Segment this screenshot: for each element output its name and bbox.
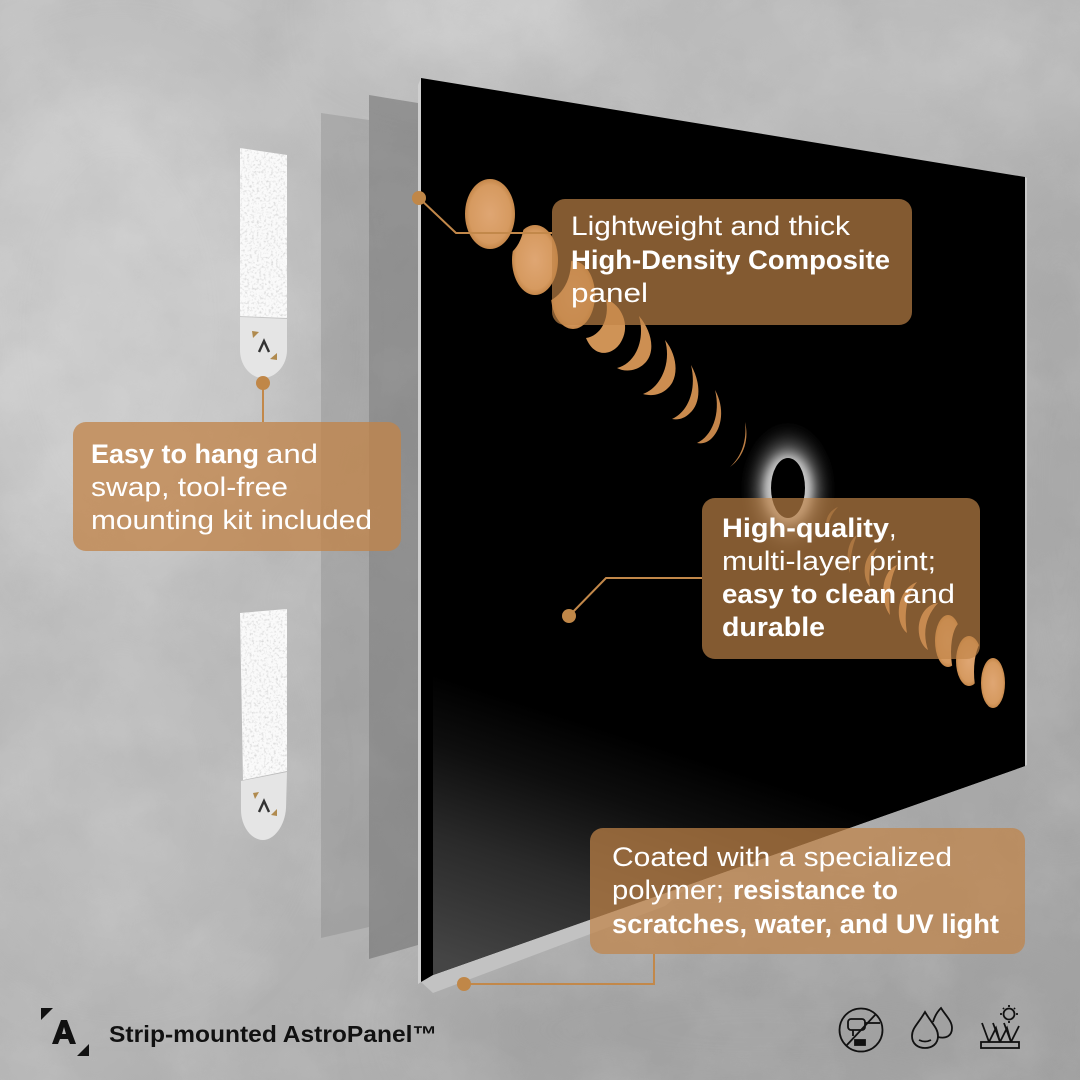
callout: easy to hang: Easy to hang [91, 439, 259, 469]
partial phase discs after totality [826, 507, 1005, 708]
product name: Strip-mounted AstroPanel™ [109, 1021, 437, 1047]
callout: print quality: multi-layer print; [722, 546, 936, 576]
panel underside edge [421, 885, 690, 993]
callout: composite panel: High-Density Composite [571, 245, 890, 275]
callout: print quality: easy to clean [722, 579, 896, 609]
panel glare gradient [433, 640, 1025, 975]
callout: easy to hang [73, 422, 401, 551]
callout: print quality: High-quality [722, 513, 889, 543]
light panel side edge [418, 78, 421, 984]
velcro strip upper [240, 148, 287, 318]
panel right edge [1025, 177, 1027, 766]
callout: print quality [702, 498, 980, 659]
mounting strip: upper [240, 148, 287, 378]
icon: no drilling [840, 1008, 882, 1052]
mounting strip: lower [240, 609, 287, 840]
connector: mounting kit [256, 376, 270, 422]
translucent layer: rear film [321, 113, 369, 938]
mounting tab upper [240, 317, 287, 378]
icon: UV resistant surface [981, 1005, 1019, 1048]
callout: print quality: , [889, 513, 897, 543]
connector: coating [457, 954, 654, 991]
callout: easy to hang: mounting kit included [91, 505, 372, 535]
icon: water drops [912, 1008, 952, 1048]
brand logo [41, 1008, 89, 1056]
callout: easy to hang: and [266, 439, 318, 469]
callout: polymer coating: Coated with a specialized [612, 842, 952, 872]
velcro strip lower [240, 609, 287, 780]
translucent layer: middle film [369, 95, 418, 959]
eclipse sequence print [462, 179, 1005, 708]
callout: print quality: durable [722, 612, 825, 642]
connector: print [562, 578, 702, 623]
callout: composite panel: Lightweight and thick [571, 211, 851, 241]
total eclipse corona [738, 417, 838, 561]
mounting tab lower [241, 772, 287, 840]
callout: polymer coating: resistance to [733, 875, 898, 905]
callout: composite panel [552, 199, 912, 325]
connector: composite panel [412, 191, 552, 233]
callout: polymer coating: polymer; [612, 875, 724, 905]
callout: composite panel: panel [571, 278, 648, 308]
tab logo upper [252, 331, 277, 360]
callout: print quality: and [903, 579, 955, 609]
callout: easy to hang: swap, tool-free [91, 472, 288, 502]
callout: polymer coating [590, 828, 1025, 954]
callout: polymer coating: scratches, water, and UV light [612, 909, 999, 939]
partial phase discs before totality [462, 179, 746, 467]
black composite panel [421, 78, 1025, 982]
tab logo lower [253, 792, 277, 816]
